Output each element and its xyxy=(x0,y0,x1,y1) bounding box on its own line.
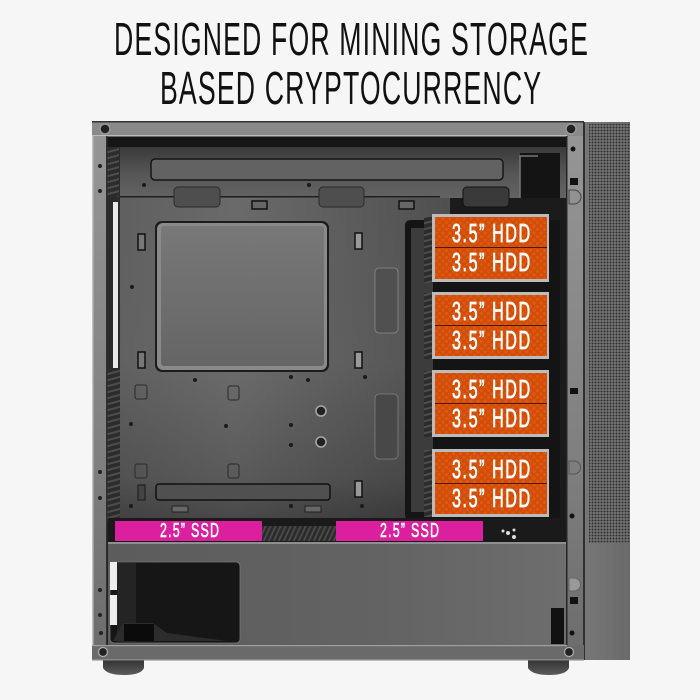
hdd label 3 xyxy=(432,370,549,437)
case interior xyxy=(92,122,584,660)
upper slot and cutouts xyxy=(120,153,560,209)
title: DESIGNED FOR MINING STORAGE xyxy=(114,13,588,65)
drive cage xyxy=(405,217,560,520)
hdd label 4: 3.5” HDD xyxy=(452,483,530,513)
case feet xyxy=(103,660,569,675)
pc case xyxy=(92,121,630,675)
hdd label 2: 3.5” HDD xyxy=(452,325,530,355)
hdd label 4 xyxy=(432,449,549,517)
bottom bar xyxy=(92,645,584,660)
hdd label 1 xyxy=(432,214,549,282)
hdd label 3: 3.5” HDD xyxy=(452,374,530,404)
ssd label 1: 2.5” SSD xyxy=(160,519,219,542)
ssd label 2: 2.5” SSD xyxy=(380,519,439,542)
front panel xyxy=(585,122,630,660)
lower bay strip xyxy=(108,518,567,542)
hdd label 2 xyxy=(432,292,549,359)
psu window xyxy=(110,562,240,643)
top bar xyxy=(92,121,584,136)
front mesh xyxy=(589,124,630,543)
hdd label 1: 3.5” HDD xyxy=(452,218,530,248)
title xyxy=(114,13,588,114)
ssd label 2 xyxy=(336,519,483,542)
hdd label 4: 3.5” HDD xyxy=(452,454,530,484)
right rail xyxy=(566,122,585,660)
hdd label 3: 3.5” HDD xyxy=(452,403,530,433)
title: BASED CRYPTOCURRENCY xyxy=(160,62,541,114)
hdd label 2: 3.5” HDD xyxy=(452,296,530,326)
ssd label 1 xyxy=(115,519,262,542)
motherboard tray cutout xyxy=(155,221,329,372)
psu shroud xyxy=(108,542,567,645)
hdd label 1: 3.5” HDD xyxy=(452,247,530,277)
left rail xyxy=(92,136,108,660)
tray slots and cable holes xyxy=(129,183,398,512)
